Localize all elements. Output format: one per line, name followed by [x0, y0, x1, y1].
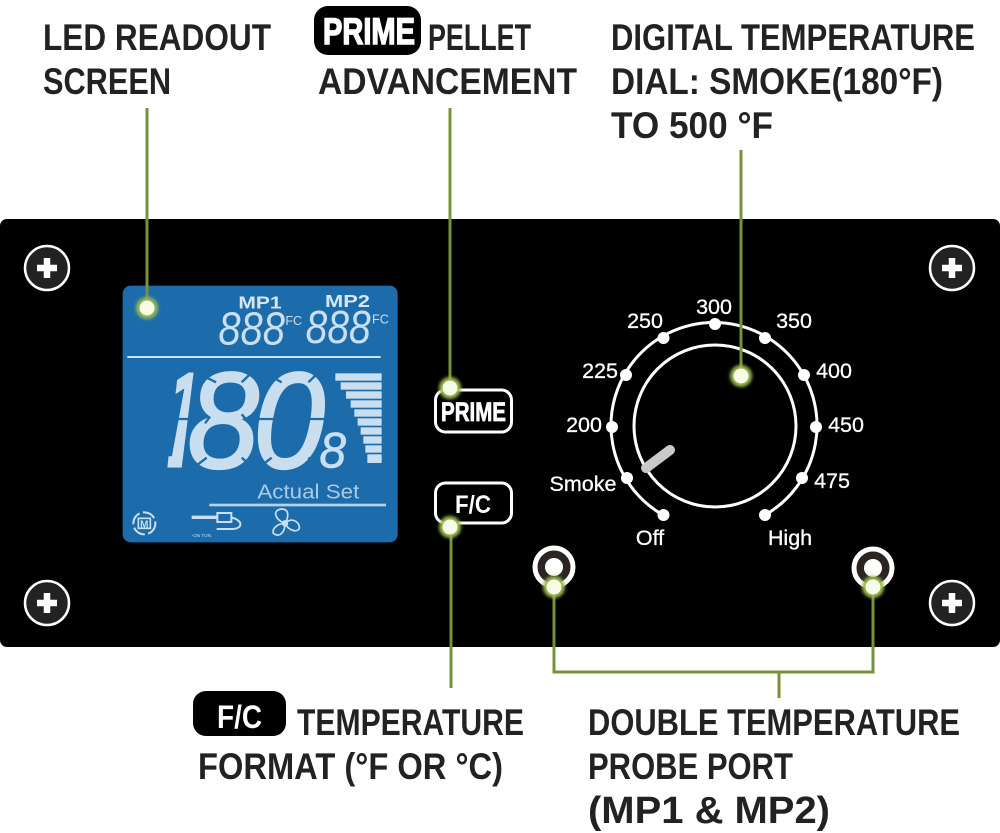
icon: mode	[133, 512, 155, 534]
dial knob ring	[634, 345, 796, 507]
scale labels: High	[768, 526, 812, 550]
heading: double temperature probe port	[588, 702, 960, 832]
main temperature readout 180	[167, 371, 346, 470]
button: PRIME	[436, 390, 512, 432]
heading: double temperature probe port: (MP1 & MP2)	[588, 790, 830, 832]
probe labels MP1 and MP2: MP2	[325, 291, 370, 311]
segment gaps in the readout	[167, 371, 330, 467]
scale labels: 475	[814, 469, 850, 493]
probe labels MP1 and MP2	[238, 291, 370, 312]
leader lines	[147, 108, 873, 698]
main temperature readout 180: 8	[319, 423, 346, 479]
probe labels MP1 and MP2: MP1	[238, 292, 282, 312]
probe temperature readouts: FC	[285, 314, 302, 328]
label: Actual Set: Actual Set	[257, 481, 360, 503]
main temperature readout 180: 1	[145, 344, 217, 497]
probe temperature readouts: 888	[218, 302, 285, 354]
heading: prime pellet advancement: PELLET	[428, 17, 531, 58]
heading: double temperature probe port: PROBE PORT	[588, 746, 793, 787]
heading: prime pellet advancement	[314, 6, 577, 102]
heading: prime pellet advancement: ADVANCEMENT	[318, 61, 577, 102]
probe port right	[854, 549, 892, 587]
button: PRIME: PRIME	[441, 397, 506, 427]
button: F/C	[436, 483, 512, 523]
panel: LCD readout screen	[123, 286, 398, 542]
icon: mode: M	[140, 520, 148, 531]
heading: temperature format	[193, 691, 524, 787]
scale labels: 400	[816, 359, 852, 383]
button: F/C: F/C	[455, 491, 491, 519]
callout markers	[136, 297, 884, 598]
heading: LED readout screen: LED READOUT	[43, 17, 271, 58]
scale labels: 450	[828, 413, 864, 437]
probe temperature readouts	[218, 301, 389, 354]
panel: black control board	[0, 219, 1000, 647]
icon: screw bottom right	[930, 581, 974, 625]
heading: temperature format: TEMPERATURE	[297, 702, 524, 743]
heading: digital temperature dial	[611, 17, 975, 146]
scale labels: 300	[696, 295, 732, 319]
heading: temperature format: FORMAT (°F OR °C)	[198, 746, 503, 787]
temperature dial	[550, 295, 864, 550]
scale dots	[606, 318, 822, 521]
scale labels: 250	[627, 309, 663, 333]
scale labels: Off	[636, 526, 664, 550]
main temperature readout 180: 8	[187, 344, 259, 497]
icon: igniter	[192, 513, 240, 538]
heading: temperature format: F/C	[217, 699, 262, 735]
main temperature readout 180: 0	[253, 344, 325, 497]
heading: prime pellet advancement: PRIME	[323, 11, 415, 52]
heading: LED readout screen: SCREEN	[43, 61, 171, 102]
icon: screw top left	[25, 246, 69, 290]
icon: fan	[273, 509, 299, 535]
knob pointer	[646, 450, 670, 468]
heading: digital temperature dial: DIAL: SMOKE(180°F)	[611, 61, 943, 102]
probe port left	[535, 548, 573, 586]
icon: screw bottom left	[25, 581, 69, 625]
probe temperature readouts: FC	[372, 313, 389, 327]
heading: LED readout screen	[43, 17, 271, 102]
scale labels	[550, 295, 864, 550]
heading: digital temperature dial: TO 500 °F	[611, 105, 773, 146]
scale labels: 225	[582, 359, 618, 383]
probe temperature readouts: 888	[306, 301, 371, 353]
scale labels: Smoke	[550, 472, 616, 496]
icon: igniter: -ON TON	[192, 533, 211, 538]
dial scale arc	[611, 323, 817, 515]
level bar graph	[335, 373, 382, 463]
scale labels: 200	[566, 413, 602, 437]
scale labels: 350	[776, 309, 812, 333]
icon: screw top right	[930, 246, 974, 290]
